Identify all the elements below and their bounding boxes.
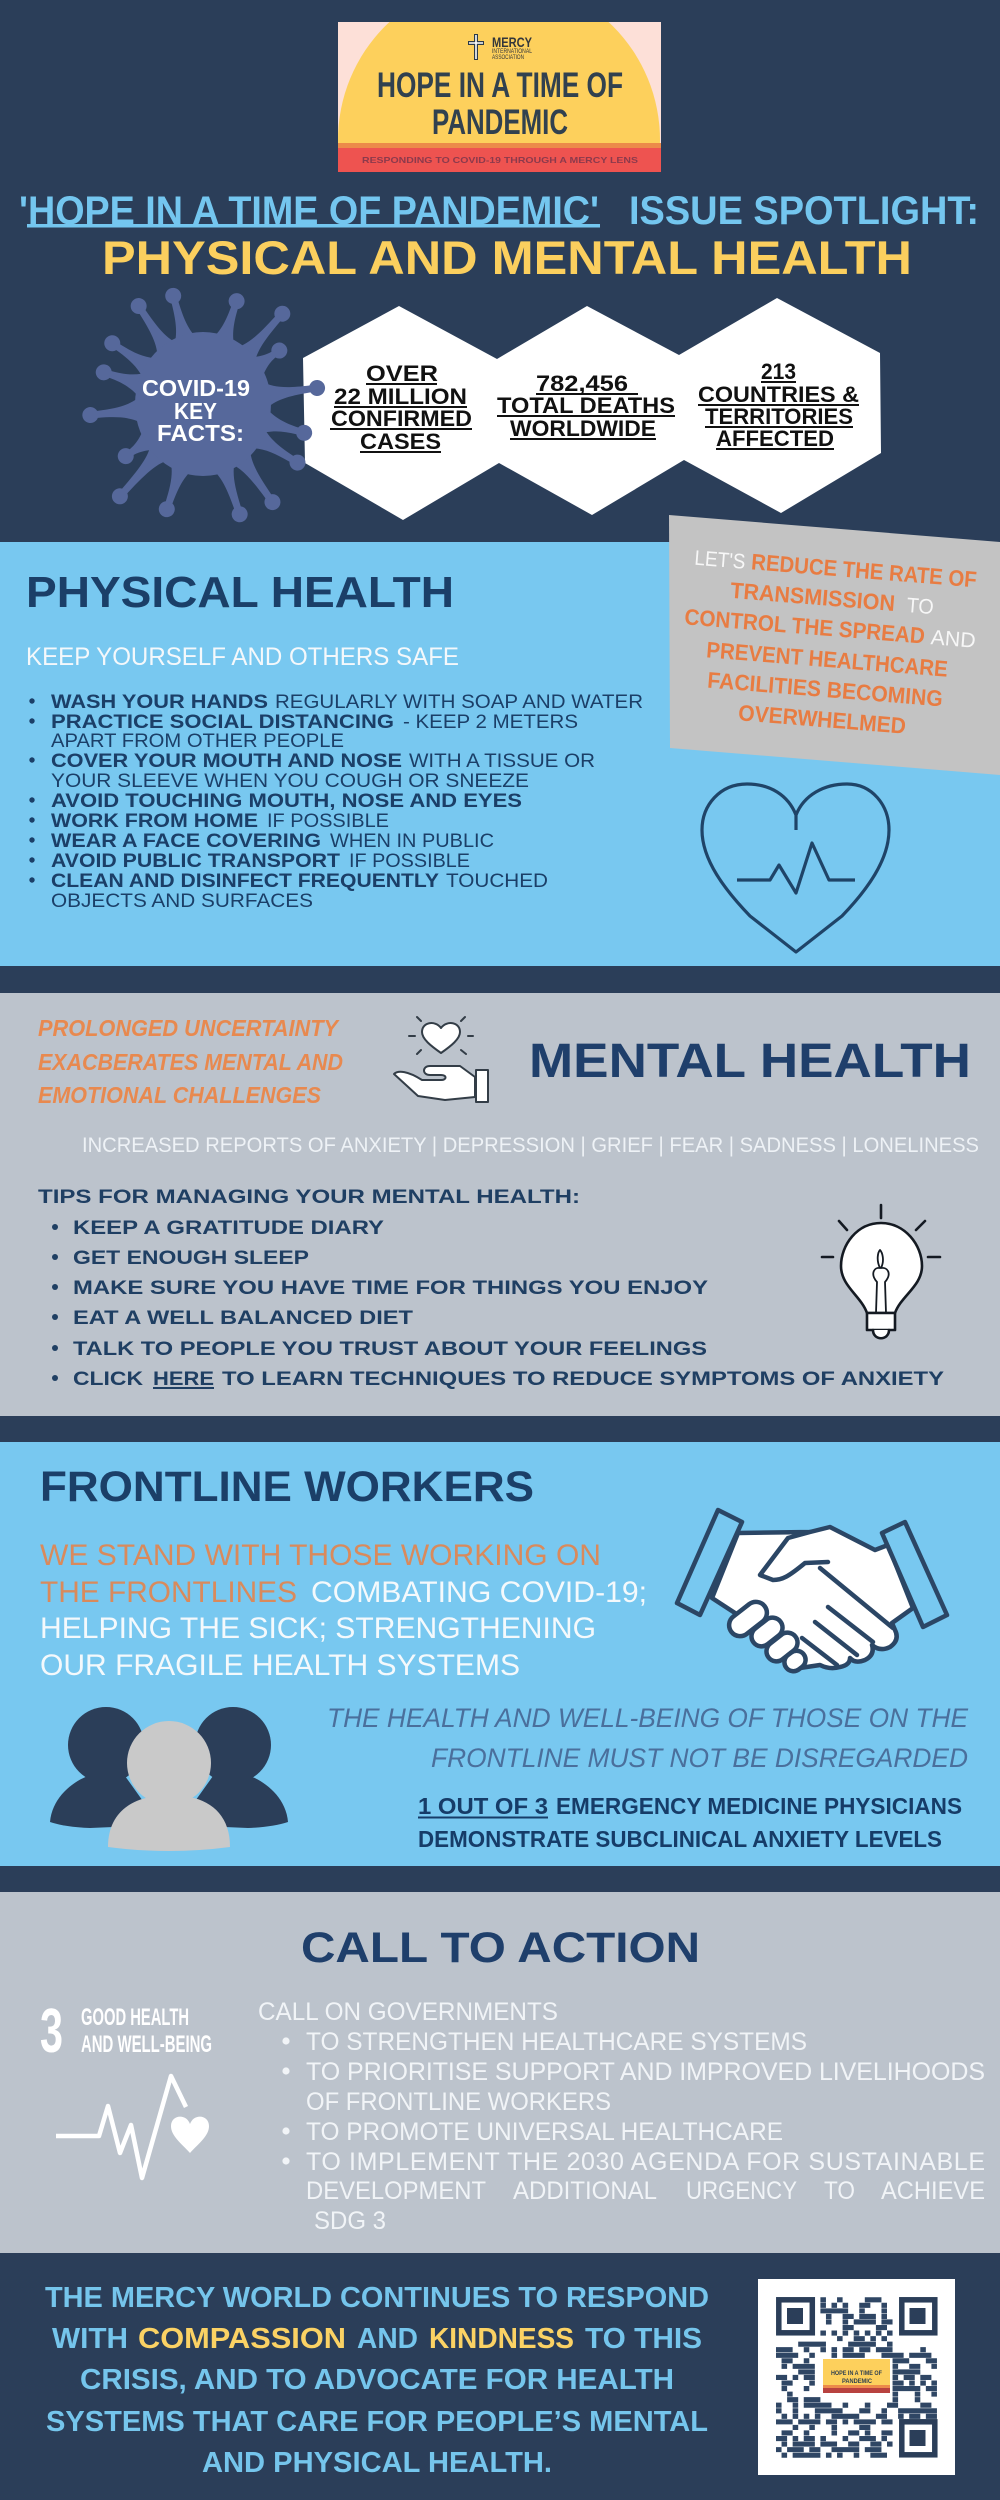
logo banner: Hope in a Time of Pandemic: PANDEMIC (432, 103, 568, 142)
list: safety advice: AVOID PUBLIC TRANSPORT (51, 850, 340, 872)
list: mental health tips: GET ENOUGH SLEEP (73, 1247, 309, 1269)
list: calls on governments: SDG 3 (314, 2207, 386, 2235)
list: safety advice: CLEAN AND DISINFECT FREQUENTLY (51, 870, 439, 892)
list: safety advice: WASH YOUR HANDS (51, 691, 268, 713)
callout: reduce transmission: TRANSMISSION (729, 578, 896, 616)
badge: SDG 3 good health: GOOD HEALTH (81, 2004, 189, 2031)
text: health and well-being statement: THE HEALTH AND WELL-BEING OF THOSE ON THE (327, 1703, 969, 1733)
list: safety advice: APART FROM OTHER PEOPLE (51, 730, 344, 752)
logo banner: Hope in a Time of Pandemic: ASSOCIATION (492, 55, 524, 61)
list: safety advice: TOUCHED (446, 870, 548, 892)
badge: SDG 3 good health: 3 (40, 1997, 63, 2066)
callout: reduce transmission: PREVENT HEALTHCARE (706, 637, 949, 682)
list: calls on governments (258, 1998, 985, 2235)
list: mental health tips: TIPS FOR MANAGING YOUR MENTAL HEALTH: (38, 1186, 580, 1208)
panel: call to action (0, 1892, 1000, 2253)
text: we stand with frontline workers: WE STAND WITH THOSE WORKING ON (40, 1539, 601, 1572)
text: health and well-being statement (327, 1703, 969, 1773)
logo banner: Hope in a Time of Pandemic: INTERNATIONAL (492, 49, 533, 55)
title: issue spotlight: ISSUE SPOTLIGHT: (629, 189, 979, 233)
callout: reduce transmission: REDUCE THE RATE OF (750, 549, 978, 592)
list: safety advice: PRACTICE SOCIAL DISTANCING (51, 711, 394, 733)
statistic: physician anxiety: 1 OUT OF 3 (418, 1793, 548, 1819)
closing statement: THE MERCY WORLD CONTINUES TO RESPOND (45, 2282, 709, 2314)
closing statement: COMPASSION (138, 2323, 346, 2355)
list: safety advice: IF POSSIBLE (267, 810, 389, 832)
icon: heart with pulse (702, 784, 889, 952)
text: we stand with frontline workers: OUR FRAGILE HEALTH SYSTEMS (40, 1649, 520, 1682)
list: calls on governments: OF FRONTLINE WORKERS (306, 2088, 611, 2116)
statistic: physician anxiety (418, 1793, 962, 1852)
callout: reduce transmission: OVERWHELMED (737, 700, 907, 739)
list: calls on governments: TO PROMOTE UNIVERSAL HEALTHCARE (306, 2118, 783, 2146)
list: mental health tips: TALK TO PEOPLE YOU TRUST ABOUT YOUR FEELINGS (73, 1338, 707, 1360)
text: increased reports: INCREASED REPORTS OF ANXIETY | DEPRESSION | GRIEF | FEAR | SADNESS | LONELINESS (82, 1134, 979, 1157)
list: safety advice: OBJECTS AND SURFACES (51, 890, 313, 912)
list: safety advice: YOUR SLEEVE WHEN YOU COUGH OR SNEEZE (51, 770, 529, 792)
callout: reduce transmission: TO (906, 594, 935, 619)
callout: prolonged uncertainty: PROLONGED UNCERTAINTY (38, 1015, 341, 1041)
list: safety advice: REGULARLY WITH SOAP AND WATER (275, 691, 643, 713)
callout: reduce transmission (669, 515, 1000, 775)
heading: mental health: MENTAL HEALTH (529, 1035, 971, 1088)
fact: confirmed cases: OVER (366, 361, 438, 386)
fact: countries and territories: 213 (761, 359, 796, 384)
icon: virus with key facts label: KEY (174, 398, 217, 424)
title: issue spotlight (19, 189, 979, 233)
callout: prolonged uncertainty (38, 1015, 343, 1108)
closing statement: WITH (52, 2323, 128, 2355)
fact: total deaths (497, 371, 675, 441)
list: mental health tips: EAT A WELL BALANCED DIET (73, 1307, 413, 1329)
QR centre logo (823, 2359, 890, 2393)
icon: group of people (50, 1707, 288, 1851)
fact: countries and territories: TERRITORIES (705, 404, 853, 429)
fact: countries and territories: COUNTRIES & (698, 382, 859, 407)
text: we stand with frontline workers: COMBATING COVID-19; (311, 1576, 647, 1609)
panel: physical health (0, 542, 1000, 966)
statistic: physician anxiety: DEMONSTRATE SUBCLINICAL ANXIETY LEVELS (418, 1826, 942, 1852)
list: calls on governments: TO PRIORITISE SUPPORT AND IMPROVED LIVELIHOODS (306, 2058, 985, 2086)
icon: virus with key facts label: COVID-19 (142, 375, 250, 401)
list: calls on governments: ACHIEVE (881, 2177, 985, 2205)
logo banner: Hope in a Time of Pandemic: MERCY (492, 34, 533, 50)
list: calls on governments: CALL ON GOVERNMENTS (258, 1998, 558, 2026)
list: safety advice: IF POSSIBLE (349, 850, 470, 872)
list: mental health tips (38, 1186, 944, 1390)
closing statement: AND PHYSICAL HEALTH. (202, 2447, 552, 2479)
heading: frontline workers: FRONTLINE WORKERS (40, 1463, 534, 1511)
icon: virus with key facts label (81, 284, 327, 527)
text: health and well-being statement: FRONTLINE MUST NOT BE DISREGARDED (431, 1743, 968, 1773)
list: calls on governments: TO (824, 2177, 855, 2205)
logo banner: Hope in a Time of Pandemic (338, 22, 661, 172)
subheading: keep safe: KEEP YOURSELF AND OTHERS SAFE (26, 643, 459, 671)
heading: physical health: PHYSICAL HEALTH (26, 568, 454, 617)
list: calls on governments: DEVELOPMENT (306, 2177, 486, 2205)
list: mental health tips: MAKE SURE YOU HAVE TIME FOR THINGS YOU ENJOY (73, 1277, 708, 1299)
list: calls on governments: ADDITIONAL (513, 2177, 657, 2205)
list: safety advice: COVER YOUR MOUTH AND NOSE (51, 750, 402, 772)
logo banner: Hope in a Time of Pandemic: RESPONDING TO COVID-19 THROUGH A MERCY LENS (362, 155, 638, 165)
icon: light bulb (822, 1205, 940, 1338)
icon: heart in hand (394, 1017, 488, 1102)
list: mental health tips: CLICK (73, 1368, 143, 1390)
list: safety advice (29, 691, 643, 912)
panel: frontline workers (0, 1442, 1000, 1866)
list: safety advice: WITH A TISSUE OR (409, 750, 595, 772)
fact: total deaths: 782,456 (536, 371, 628, 396)
panel: mental health (0, 993, 1000, 1416)
list: calls on governments: URGENCY (686, 2177, 797, 2205)
list: calls on governments: TO IMPLEMENT THE 2030 AGENDA FOR SUSTAINABLE (306, 2148, 985, 2176)
list: safety advice: WEAR A FACE COVERING (51, 830, 321, 852)
icon: handshake (677, 1510, 947, 1675)
text: we stand with frontline workers: HELPING THE SICK; STRENGTHENING (40, 1612, 596, 1645)
callout: reduce transmission: CONTROL THE SPREAD (684, 604, 926, 649)
list: safety advice: AVOID TOUCHING MOUTH, NOSE AND EYES (51, 790, 522, 812)
callout: prolonged uncertainty: EXACBERATES MENTAL AND (38, 1049, 343, 1075)
badge: SDG 3 good health: AND WELL-BEING (81, 2031, 212, 2058)
fact: countries and territories (698, 359, 859, 451)
fact: confirmed cases (330, 361, 472, 454)
closing statement: KINDNESS (429, 2323, 574, 2355)
closing statement (45, 2282, 709, 2479)
logo banner: Hope in a Time of Pandemic: HOPE IN A TIME OF (377, 66, 623, 105)
key facts hexagons (303, 298, 881, 520)
QR centre logo: PANDEMIC (842, 2378, 872, 2385)
list: safety advice: WORK FROM HOME (51, 810, 258, 832)
callout: prolonged uncertainty: EMOTIONAL CHALLENGES (38, 1082, 322, 1108)
text: we stand with frontline workers (40, 1539, 647, 1682)
closing statement: CRISIS, AND TO ADVOCATE FOR HEALTH (80, 2364, 674, 2396)
list: mental health tips: KEEP A GRATITUDE DIARY (73, 1217, 384, 1239)
fact: confirmed cases: CASES (360, 429, 441, 454)
fact: total deaths: TOTAL DEATHS (497, 393, 675, 418)
closing statement: AND (357, 2323, 418, 2355)
closing statement: SYSTEMS THAT CARE FOR PEOPLE’S MENTAL (46, 2406, 708, 2438)
callout: reduce transmission: FACILITIES BECOMING (706, 668, 944, 711)
fact: confirmed cases: 22 MILLION (334, 384, 467, 409)
list: safety advice: - KEEP 2 METERS (403, 711, 578, 733)
closing statement: TO THIS (585, 2323, 702, 2355)
fact: confirmed cases: CONFIRMED (331, 406, 472, 431)
badge: SDG 3 good health (40, 1997, 212, 2178)
fact: total deaths: WORLDWIDE (510, 416, 656, 441)
icon: virus with key facts label: FACTS: (157, 420, 244, 446)
list: mental health tips: TO LEARN TECHNIQUES TO REDUCE SYMPTOMS OF ANXIETY (222, 1368, 944, 1390)
list: safety advice: WHEN IN PUBLIC (330, 830, 494, 852)
QR centre logo: HOPE IN A TIME OF (831, 2370, 882, 2377)
callout: reduce transmission: LET'S (694, 547, 746, 574)
fact: countries and territories: AFFECTED (716, 426, 834, 451)
callout: reduce transmission: AND (930, 626, 976, 653)
heading: call to action: CALL TO ACTION (301, 1924, 700, 1972)
list: mental health tips: HERE (153, 1368, 214, 1390)
QR code (758, 2279, 955, 2475)
title: issue spotlight: 'HOPE IN A TIME OF PANDEMIC' (19, 189, 599, 233)
statistic: physician anxiety: EMERGENCY MEDICINE PHYSICIANS (556, 1793, 962, 1819)
list: calls on governments: TO STRENGTHEN HEALTHCARE SYSTEMS (306, 2028, 807, 2056)
subtitle: physical and mental health: PHYSICAL AND MENTAL HEALTH (102, 231, 912, 284)
text: we stand with frontline workers: THE FRONTLINES (40, 1576, 297, 1609)
